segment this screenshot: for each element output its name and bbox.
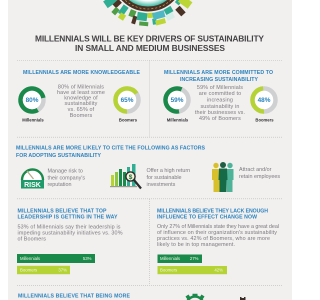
body text: have at least some <box>57 90 105 96</box>
bar chart: Boomers <box>160 268 177 272</box>
bar chart: Millennials <box>160 256 180 261</box>
panel: factors for adopting sustainability <box>16 146 280 192</box>
bar chart: 53% <box>83 256 92 261</box>
donut: boomers 65%: Boomers <box>119 118 138 122</box>
donut: boomers 48% <box>252 88 276 122</box>
body text: vs. 65% of <box>68 107 95 113</box>
title: MILLENNIALS WILL BE KEY DRIVERS OF SUSTAINABILITY <box>35 34 264 44</box>
heading <box>157 209 268 221</box>
icon: risk gauge: RISK <box>24 182 41 189</box>
donut: millennials 80%: 80% <box>26 97 39 104</box>
text: high return: Offer a high return <box>146 168 190 174</box>
body text: 59% of Millennials <box>197 85 243 91</box>
body text: of Boomers <box>18 236 46 242</box>
heading: FOR ADOPTING SUSTAINABILITY <box>16 153 102 159</box>
bar chart: Boomers <box>20 268 37 272</box>
body text: increasing <box>207 98 233 104</box>
body text: sustainability <box>65 101 98 107</box>
body text: 53% of Millennials say their leadership is <box>18 224 121 230</box>
heading: MILLENNIALS BELIEVE THEY LACK ENOUGH <box>157 209 268 215</box>
body text: of influence on their organization's sustainability <box>157 230 277 236</box>
donut: millennials 80% <box>16 84 48 122</box>
heading <box>16 146 206 159</box>
donut: boomers 65%: 65% <box>121 97 134 104</box>
body text: 80% of Millennials <box>58 84 104 90</box>
icon: bar chart with magnifier <box>110 164 141 188</box>
heading: MILLENNIALS ARE MORE COMMITTED TO <box>164 70 273 76</box>
title <box>35 34 264 53</box>
icon: bar chart with magnifier: $ <box>129 174 133 181</box>
body text: likely to be in top management. <box>157 242 235 248</box>
title: IN SMALL AND MEDIUM BUSINESSES <box>75 43 225 53</box>
body text: Boomers <box>70 113 92 119</box>
heading: INCREASING SUSTAINABILITY <box>180 77 259 83</box>
body text: Only 27% of Millennials state they have a great deal <box>157 224 279 230</box>
bar chart: Millennials <box>20 256 40 261</box>
bar chart: 27% <box>190 256 199 261</box>
body text: their businesses vs. <box>195 110 245 116</box>
panel: top leadership <box>17 209 123 274</box>
donut: millennials 59%: 59% <box>171 97 184 104</box>
donut: millennials 80%: Millennials <box>22 118 44 122</box>
text: attract employees: retain employees <box>239 174 280 180</box>
icon: dark figure top <box>240 297 246 300</box>
panel: more committed <box>164 70 276 122</box>
icon: gear <box>186 294 204 300</box>
donut: millennials 59%: Millennials <box>167 118 189 122</box>
text: manage risk: reputation <box>48 182 71 188</box>
panel: lack influence <box>157 209 279 274</box>
body text: 49% of Boomers <box>199 116 241 122</box>
donut: boomers 48%: 48% <box>258 97 271 104</box>
donut: boomers 65% <box>116 88 138 122</box>
body text: knowledge of <box>64 96 98 102</box>
icon: risk gauge <box>21 170 44 189</box>
heading: MILLENNIALS ARE MORE LIKELY TO CITE THE FOLLOWING AS FACTORS <box>16 146 206 152</box>
heading: MILLENNIALS ARE MORE KNOWLEDGEABLE <box>23 70 141 76</box>
icon: three employees <box>212 162 234 192</box>
body text: sustainability in <box>200 104 240 110</box>
bar chart <box>17 254 95 274</box>
body text: practices vs. 42% of Boomers, who are more <box>157 236 270 242</box>
bar chart <box>158 254 227 274</box>
text: manage risk: Manage risk to <box>48 168 83 174</box>
body text: are committed to <box>199 91 241 97</box>
heading <box>18 209 118 221</box>
heading <box>164 70 273 83</box>
bar chart: 37% <box>58 268 67 272</box>
heading: MILLENNIALS BELIEVE THAT TOP <box>18 209 107 215</box>
body text: impeding sustainability initiatives vs. 30% <box>18 230 123 236</box>
bar chart: 42% <box>214 268 223 272</box>
text: high return: investments <box>146 182 176 188</box>
donut: boomers 48%: Boomers <box>255 118 274 122</box>
donut: millennials 59% <box>164 87 190 122</box>
heading: LEADERSHIP IS GETTING IN THE WAY <box>18 215 118 221</box>
panel: more knowledgeable <box>16 70 141 122</box>
heading: INFLUENCE TO EFFECT CHANGE NOW <box>157 215 257 221</box>
text: attract employees: Attract and/or <box>239 167 272 173</box>
illustration: road ring with city and nature <box>103 0 192 26</box>
text: manage risk: their company's <box>48 175 85 181</box>
text: high return: for sustainable <box>146 175 182 181</box>
panel: bottom section heading: MILLENNIALS BELIEVE THAT BEING MORE <box>18 294 131 300</box>
